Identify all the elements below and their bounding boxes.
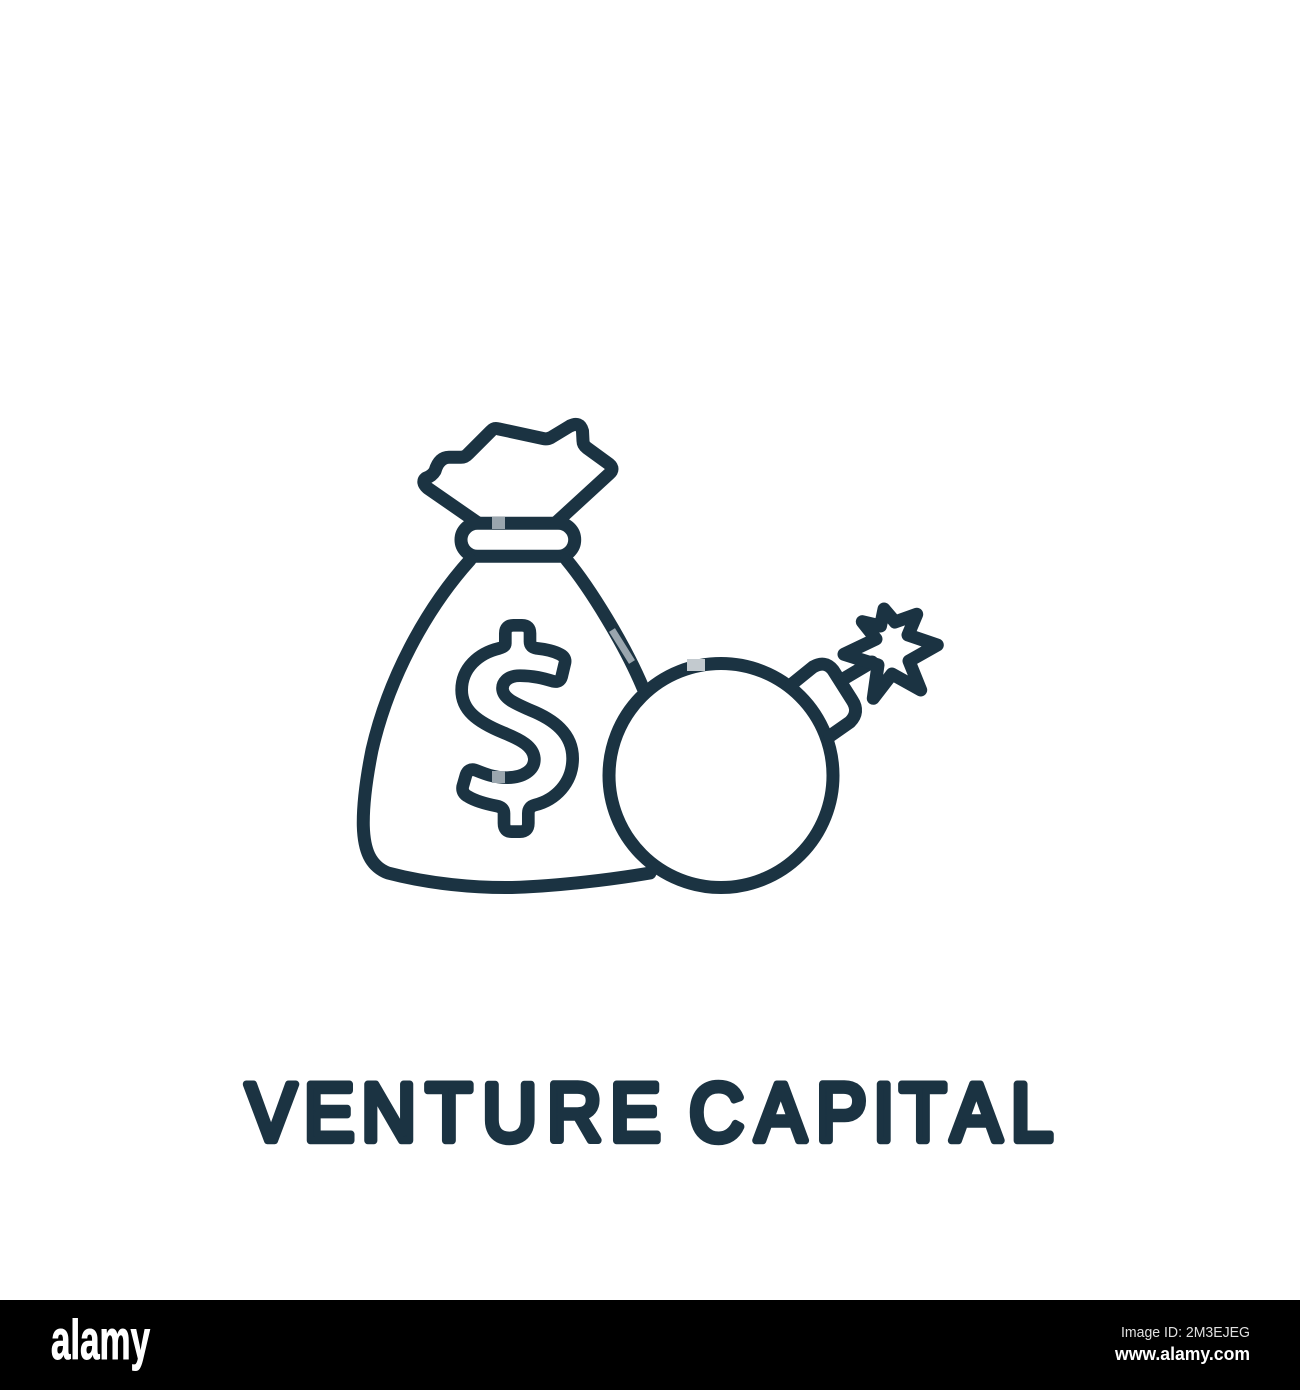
- bag top ruffle: [424, 424, 612, 523]
- dollar sign: [462, 625, 573, 832]
- bag body: [363, 560, 650, 888]
- stock logo: alamy: [51, 1308, 150, 1371]
- image id: Image ID: 2M3EJEG: [1121, 1324, 1250, 1341]
- footer bar: [0, 1300, 1300, 1390]
- spark: [844, 609, 937, 698]
- bomb body: [609, 664, 833, 888]
- icon: money bag: [363, 424, 650, 888]
- icon: venture capital money bag and bomb: [363, 424, 937, 888]
- icon: bomb: [609, 609, 937, 888]
- bomb cap: [792, 664, 856, 736]
- bomb fuse: [845, 662, 872, 678]
- website: www.alamy.com: [1114, 1344, 1250, 1364]
- bag neck tie: [461, 523, 575, 556]
- title: VENTURE CAPITAL: [246, 1067, 1053, 1158]
